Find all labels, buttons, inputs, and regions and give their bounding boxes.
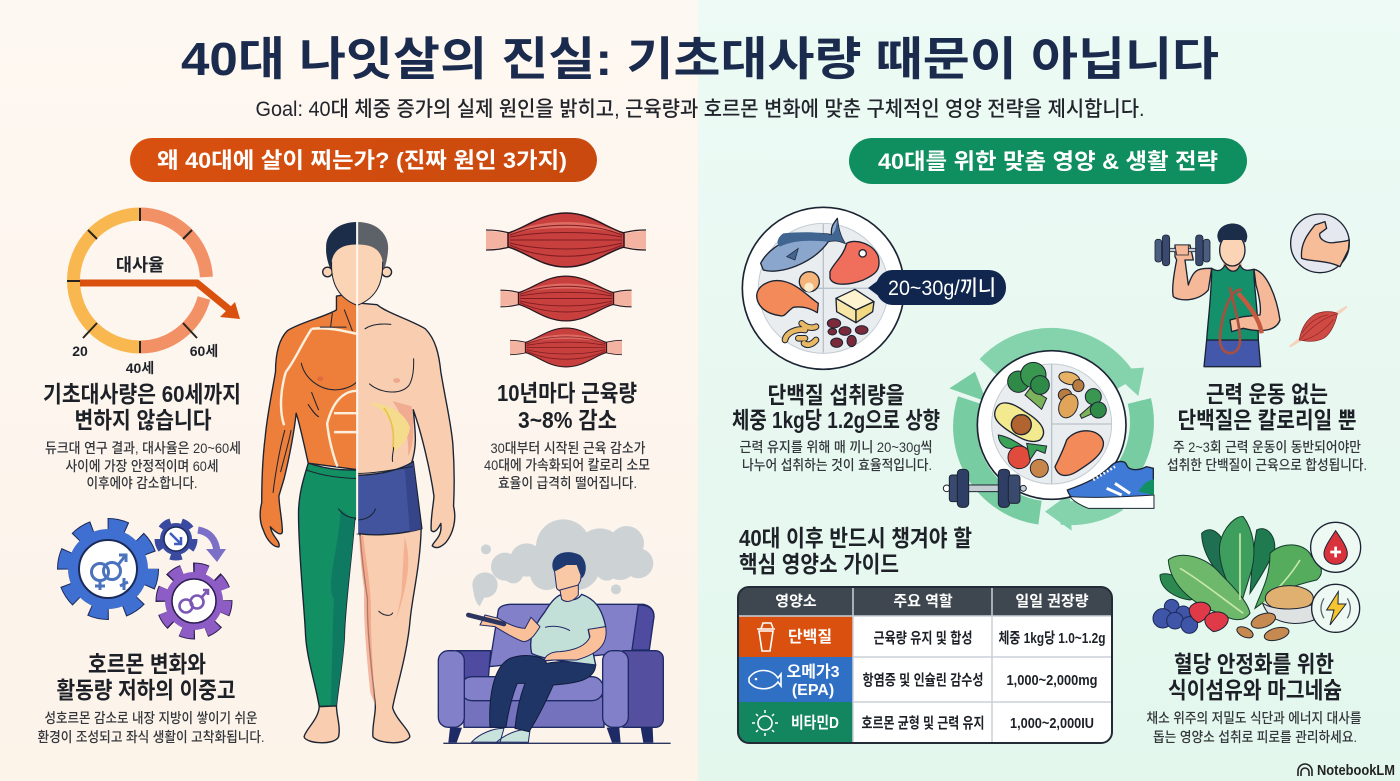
dumbbell [1155, 235, 1210, 266]
callout: 20~30g per meal [868, 270, 1006, 305]
running shoe [1067, 461, 1154, 508]
avocado [995, 403, 1044, 441]
bowl of grains [1263, 586, 1314, 623]
salmon [1055, 431, 1103, 475]
broccoli [1008, 362, 1049, 409]
row: vitamin D: 비타민D [791, 714, 839, 732]
text block: strength heading: 근력 운동 없는 [1206, 381, 1328, 407]
icon: flexed arm [1291, 214, 1349, 273]
fish [761, 218, 845, 271]
text block: muscle loss description [484, 440, 650, 491]
sofa [438, 604, 671, 743]
background: right panel [698, 0, 1400, 781]
text block: strength description: 섭취한 단백질이 근육으로 합성됩니다. [1167, 457, 1367, 473]
steak [830, 241, 879, 284]
text block: metabolism description: 이후에야 감소합니다. [86, 475, 198, 491]
text block: metabolism heading [43, 381, 241, 433]
shellfish [799, 272, 819, 292]
text block: metabolism description: 사이에 가장 안정적이며 60세 [66, 458, 218, 474]
text block: hormone description: 성호르몬 감소로 내장 지방이 쌓이기 쉬운 [44, 710, 258, 726]
bone [859, 250, 866, 257]
nuts [785, 323, 816, 345]
almonds [1235, 610, 1290, 643]
dumbbell [943, 469, 1026, 507]
text block: protein description: 나누어 섭취하는 것이 효율적입니다. [742, 457, 932, 473]
muscle: small [510, 328, 622, 367]
illustration: man strength training [1155, 214, 1354, 367]
blueberries [1153, 599, 1198, 633]
head [323, 222, 392, 305]
row: vitamin D: 1,000~2,000IU [1010, 715, 1094, 732]
strawberries [1189, 602, 1228, 632]
man [1173, 224, 1280, 367]
row: omega-3: 항염증 및 인슐린 감수성 [862, 672, 984, 689]
row: omega-3: 오메가3 [786, 663, 840, 681]
icon: hormone gears [64, 521, 227, 634]
heading: nutrient guide [739, 525, 972, 577]
chart: metabolism dial with falling arrow: 20 [72, 343, 88, 359]
table: key nutrient guide [738, 587, 1112, 743]
row: vitamin D: 호르몬 균형 및 근력 유지 [862, 715, 984, 732]
text block: muscle loss description: 30대부터 시작된 근육 감소가 [490, 440, 646, 456]
row: omega-3: (EPA) [792, 682, 834, 699]
callout: 20~30g per meal: 20~30g/끼니 [888, 277, 996, 300]
text block: blood sugar description [1146, 710, 1362, 745]
text block: metabolism description: 듀크대 연구 결과, 대사율은 20~60세 [45, 440, 241, 456]
text block: protein heading [732, 382, 940, 433]
icon: blood sugar drop [1311, 522, 1361, 572]
left section heading pill: 왜 40대에 살이 찌는가? (진짜 원인 3가지) [157, 148, 567, 173]
cycle arrows [949, 340, 1144, 531]
illustration: protein plate [742, 207, 904, 369]
text block: blood sugar heading: 혈당 안정화를 위한 [1174, 651, 1334, 677]
chart: metabolism dial with falling arrow: 60세 [190, 343, 218, 359]
plate [742, 207, 904, 369]
tomato and greens [998, 435, 1048, 477]
text block: blood sugar heading [1168, 651, 1342, 703]
text block: hormone heading [56, 651, 236, 703]
text block: metabolism heading: 기초대사량은 60세까지 [43, 381, 241, 407]
text block: muscle loss description: 효율이 급격히 떨어집니다. [498, 475, 637, 491]
row: protein: 단백질 [788, 628, 832, 646]
table border [738, 587, 1112, 743]
row: vitamin D [752, 710, 1094, 736]
text block: hormone description [38, 710, 264, 745]
header row [775, 593, 1089, 610]
right section heading pill [849, 138, 1247, 184]
text block: strength description: 주 2~3회 근력 운동이 동반되어야만 [1173, 439, 1361, 455]
right section heading pill: 40대를 위한 맞춤 영양 & 생활 전략 [878, 149, 1218, 174]
text block: metabolism description [45, 440, 241, 491]
text block: blood sugar description: 돕는 영양소 섭취로 피로를 관리하세요. [1153, 729, 1357, 745]
text block: strength heading: 단백질은 칼로리일 뿐 [1178, 407, 1356, 433]
muscle: medium [500, 276, 632, 321]
title: 40대 나잇살의 진실: 기초대사량 때문이 아닙니다 [181, 33, 1219, 85]
header row: 일일 권장량 [1015, 593, 1089, 610]
icon: muscle [1283, 297, 1354, 357]
subtitle: Goal: 40대 체중 증가의 실제 원인을 밝히고, 근육량과 호르몬 변화에 맞춘 구체적인 영양 전략을 제시합니다. [256, 98, 1144, 121]
chart: metabolism dial with falling arrow [67, 208, 240, 376]
row: omega-3 [749, 663, 1098, 699]
text block: hormone heading: 호르몬 변화와 [88, 651, 206, 677]
row: protein [757, 623, 1106, 651]
text block: hormone heading: 활동량 저하의 이중고 [56, 677, 236, 703]
text block: hormone description: 환경이 조성되고 좌식 생활이 고착화됩니다. [38, 729, 264, 745]
text block: blood sugar description: 채소 위주의 저밀도 식단과 에너지 대사를 [1146, 710, 1362, 726]
muscle: large [486, 213, 646, 267]
illustration: sedentary man on sofa [438, 519, 671, 743]
man [468, 552, 606, 742]
chart: metabolism dial with falling arrow: 40세 [126, 360, 154, 376]
background: left panel [0, 0, 698, 781]
right half: overweight body [357, 303, 455, 743]
nuts and broccoli [1055, 370, 1106, 421]
leaves [1160, 517, 1321, 620]
text block: protein heading: 체중 1kg당 1.2g으로 상향 [732, 407, 940, 433]
text block: strength description [1167, 439, 1367, 473]
heading: nutrient guide: 40대 이후 반드시 챙겨야 할 [739, 525, 972, 551]
text block: blood sugar heading: 식이섬유와 마그네슘 [1168, 677, 1342, 703]
table body [738, 587, 1112, 743]
header row: 주요 역할 [893, 593, 953, 610]
row: protein: 근육량 유지 및 합성 [874, 630, 972, 647]
center divider line [354, 220, 360, 534]
text block: muscle loss description: 40대에 가속화되어 칼로리 소모 [484, 457, 650, 473]
row: protein: 체중 1kg당 1.0~1.2g [998, 630, 1106, 647]
chart: metabolism dial with falling arrow: 대사율 [116, 255, 164, 275]
salmon [757, 281, 818, 316]
plate [977, 351, 1126, 499]
tofu [836, 289, 874, 323]
text block: protein description [740, 439, 932, 473]
header row: 영양소 [775, 593, 817, 610]
row: omega-3: 1,000~2,000mg [1006, 672, 1098, 689]
text block: muscle loss heading: 10년마다 근육량 [497, 380, 637, 406]
illustration: leafy greens, berries, nuts [1153, 517, 1361, 643]
illustration: balanced plate with cycle arrows [943, 340, 1154, 531]
illustration: split body, muscular vs. overweight [260, 220, 455, 743]
text block: strength heading [1178, 381, 1356, 433]
beans [827, 319, 868, 347]
left half: muscular body [260, 293, 360, 743]
icon: energy bolt [1312, 584, 1360, 632]
text block: muscle loss heading: 3~8% 감소 [518, 407, 617, 433]
text block: protein heading: 단백질 섭취량을 [768, 382, 904, 408]
text block: protein description: 근력 유지를 위해 매 끼니 20~30g씩 [740, 439, 932, 455]
illustration: shrinking muscles [486, 213, 646, 367]
left section heading pill [130, 138, 597, 182]
text block: metabolism heading: 변하지 않습니다 [74, 407, 212, 433]
fatigue cloud [472, 519, 653, 606]
text block: muscle loss heading [497, 380, 637, 433]
heading: nutrient guide: 핵심 영양소 가이드 [739, 551, 899, 577]
